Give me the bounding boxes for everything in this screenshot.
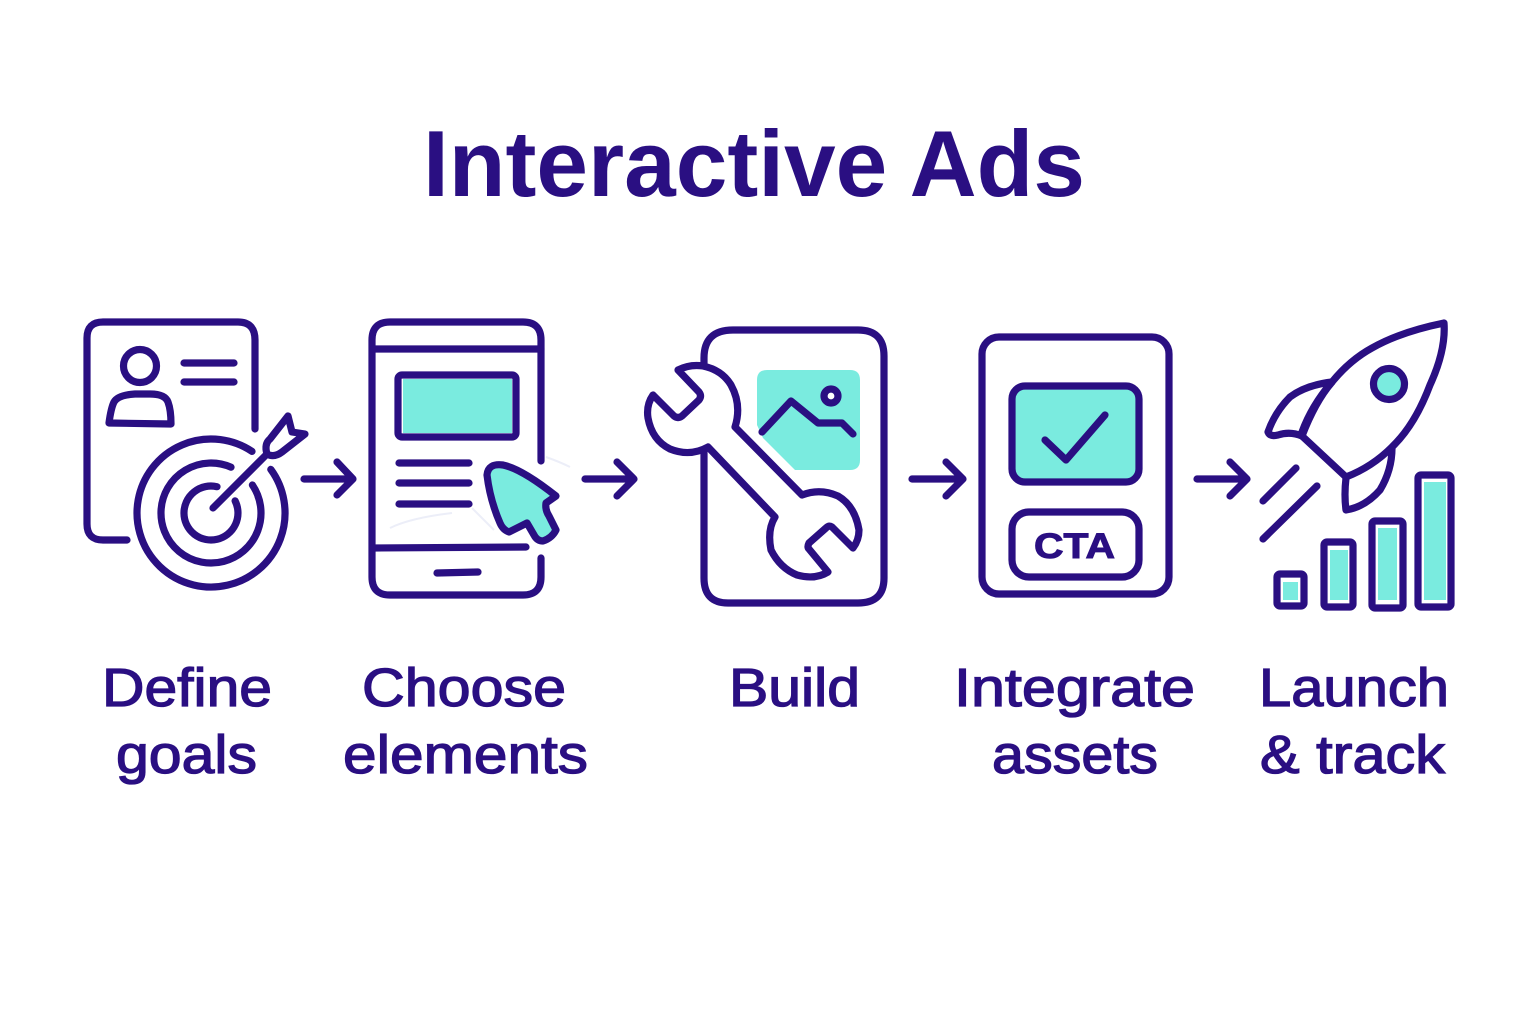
label: Define goals: goals [116, 725, 257, 785]
rocket body [1302, 323, 1444, 477]
speed lines [1263, 468, 1317, 539]
arrow: step 1 to 2 [304, 462, 353, 495]
dart shaft [213, 454, 267, 508]
rocket inner fin line [1302, 382, 1332, 432]
target rings [137, 439, 285, 587]
label: Integrate assets [954, 658, 1195, 785]
person head [124, 350, 156, 382]
growth bar 2 [1324, 542, 1353, 607]
card outline [982, 337, 1169, 594]
ad banner [403, 379, 512, 433]
mountain line [762, 401, 853, 434]
label: Integrate assets: Integrate [954, 658, 1195, 718]
label: Choose elements: Choose [362, 658, 566, 718]
label: Choose elements: elements [343, 725, 588, 785]
text lines [399, 463, 469, 504]
label: Launch & track [1259, 658, 1449, 785]
ad banner frame [398, 375, 516, 437]
growth bar 4 [1418, 475, 1451, 607]
rocket right fin [1345, 448, 1392, 510]
rocket window [1374, 368, 1404, 400]
profile text lines [184, 363, 234, 382]
card outline [704, 330, 884, 603]
growth bar 3 [1372, 521, 1403, 608]
label: Define goals: Define [102, 658, 272, 718]
sun [824, 389, 838, 403]
title: Interactive Ads [423, 111, 1085, 216]
arrow: step 2 to 3 [585, 462, 634, 496]
CTA label: CTA [1034, 527, 1115, 566]
label: Integrate assets: assets [992, 725, 1158, 785]
icon: wrench and image card [648, 330, 884, 603]
label: Define goals [102, 658, 272, 785]
cursor [487, 465, 556, 541]
arrow: step 4 to 5 [1197, 462, 1247, 496]
phone top bar [373, 345, 541, 353]
label: Launch & track: Launch [1259, 658, 1449, 718]
icon: profile card with target [87, 322, 305, 587]
profile card outline [87, 322, 255, 540]
phone outline [372, 322, 541, 595]
rocket left fin [1268, 382, 1332, 436]
label: Choose elements [343, 658, 588, 785]
label: Launch & track: & track [1260, 725, 1446, 785]
person shoulders [109, 394, 171, 424]
icon: CTA card [982, 337, 1169, 594]
image placeholder [757, 370, 860, 470]
wrench [648, 366, 859, 577]
growth bar 1 [1277, 574, 1304, 606]
CTA button [1012, 512, 1139, 577]
icon: phone with ad and cursor [372, 322, 570, 595]
check mark [1045, 415, 1105, 460]
arrow: step 3 to 4 [912, 462, 963, 496]
confirmation panel [1012, 386, 1139, 482]
phone bottom bar [373, 547, 526, 548]
label: Build: Build [729, 658, 860, 718]
dart fletching [266, 416, 305, 456]
faint motion marks [390, 457, 570, 530]
icon: rocket and growth bars [1263, 323, 1451, 608]
home indicator [437, 572, 478, 573]
